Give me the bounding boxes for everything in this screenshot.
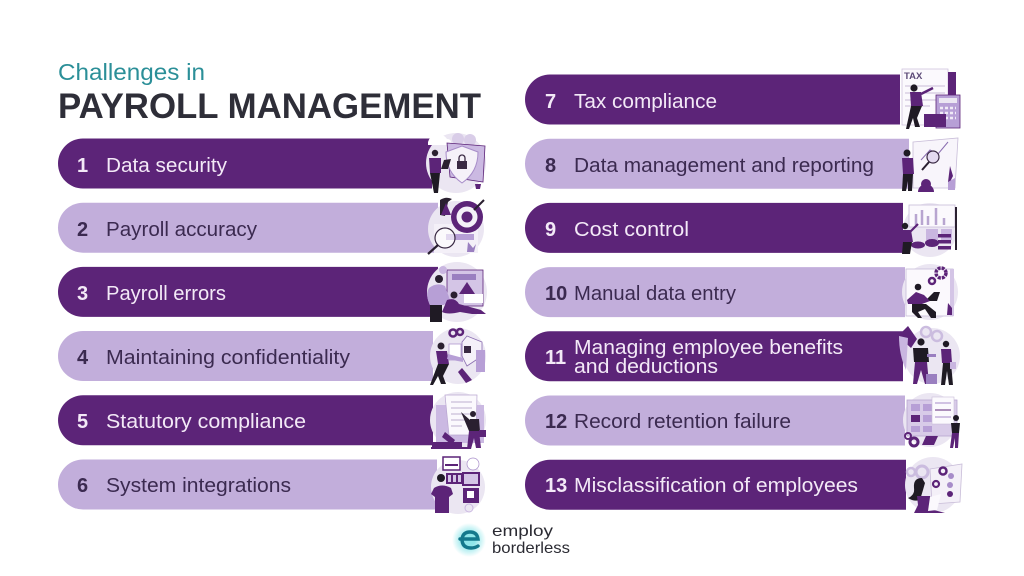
row 10: Manual data entry (525, 264, 958, 320)
row 11: Managing employee benefits and deductions: Managing employee benefits (574, 337, 843, 359)
icon: tax form and calculator (902, 69, 960, 129)
logo mark (452, 523, 486, 557)
icon: person at laptop with gears (902, 264, 958, 320)
row 11: Managing employee benefits and deductions (525, 326, 960, 385)
row 11: Managing employee benefits and deductions: and deductions (574, 356, 718, 378)
logo wordmark: employ (492, 523, 553, 540)
title line: Challenges in: Challenges in (58, 59, 205, 85)
icon: person with lock and documents (430, 328, 486, 385)
row 5: Statutory compliance: Statutory compliance (106, 411, 306, 433)
row 11: Managing employee benefits and deductions: 11 (545, 347, 566, 369)
row 9: Cost control: 9 (545, 219, 556, 241)
logo: employ borderless: borderless (492, 540, 570, 557)
row 2: Payroll accuracy: 2 (77, 219, 88, 241)
row 7: Tax compliance: 7 (545, 91, 556, 113)
row 3: Payroll errors: 3 (77, 283, 88, 305)
row 7: Tax compliance (525, 69, 960, 129)
icon: record dashboard and person (903, 393, 960, 448)
row 6: System integrations (58, 457, 485, 514)
row 9: Cost control (525, 203, 957, 257)
icon: person with error screen (427, 262, 487, 322)
row 12: Record retention failure: Record retention failure (574, 411, 791, 433)
row 4: Maintaining confidentiality: Maintaining confidentiality (106, 347, 350, 369)
row 3: Payroll errors: Payroll errors (106, 283, 226, 305)
row 8: Data management and reporting: Data management and reporting (574, 155, 874, 177)
title (58, 59, 481, 126)
logo: employ borderless (452, 523, 570, 557)
icon: two people with gears (898, 326, 960, 385)
row 9: Cost control: Cost control (574, 219, 689, 241)
row 8: Data management and reporting (525, 138, 958, 192)
icon: woman with gears and profiles (905, 457, 962, 513)
row 10: Manual data entry: 10 (545, 283, 567, 305)
row 1: Data security (58, 133, 486, 193)
row 12: Record retention failure (525, 393, 960, 448)
row 13: Misclassification of employees: 13 (545, 475, 567, 497)
row 4: Maintaining confidentiality: 4 (77, 347, 89, 369)
row 4: Maintaining confidentiality (58, 328, 486, 385)
row 12: Record retention failure: 12 (545, 411, 567, 433)
icon: document, gavel and person (430, 392, 486, 449)
row 3: Payroll errors (58, 262, 487, 322)
row 2: Payroll accuracy: Payroll accuracy (106, 219, 257, 241)
row 7: Tax compliance: Tax compliance (574, 91, 717, 113)
row 1: Data security: 1 (77, 155, 88, 177)
row 8: Data management and reporting: 8 (545, 155, 556, 177)
row 10: Manual data entry: Manual data entry (574, 283, 736, 305)
row 5: Statutory compliance: 5 (77, 411, 88, 433)
row 13: Misclassification of employees: Misclassification of employees (574, 475, 858, 497)
title line: PAYROLL MANAGEMENT: PAYROLL MANAGEMENT (58, 87, 481, 126)
icon: bar charts and coins (901, 203, 957, 257)
row 5: Statutory compliance (58, 392, 486, 449)
row 2: Payroll accuracy (58, 198, 484, 257)
row 6: System integrations: 6 (77, 475, 88, 497)
icon: shield and person (426, 133, 486, 193)
icon: tax form and calculator: TAX (904, 71, 923, 82)
icon: charts and magnifier (902, 138, 958, 192)
icon: target and magnifier (428, 198, 484, 257)
row 13: Misclassification of employees (525, 457, 962, 513)
row 6: System integrations: System integrations (106, 475, 291, 497)
icon: person and app tiles (431, 457, 485, 514)
row 1: Data security: Data security (106, 155, 227, 177)
